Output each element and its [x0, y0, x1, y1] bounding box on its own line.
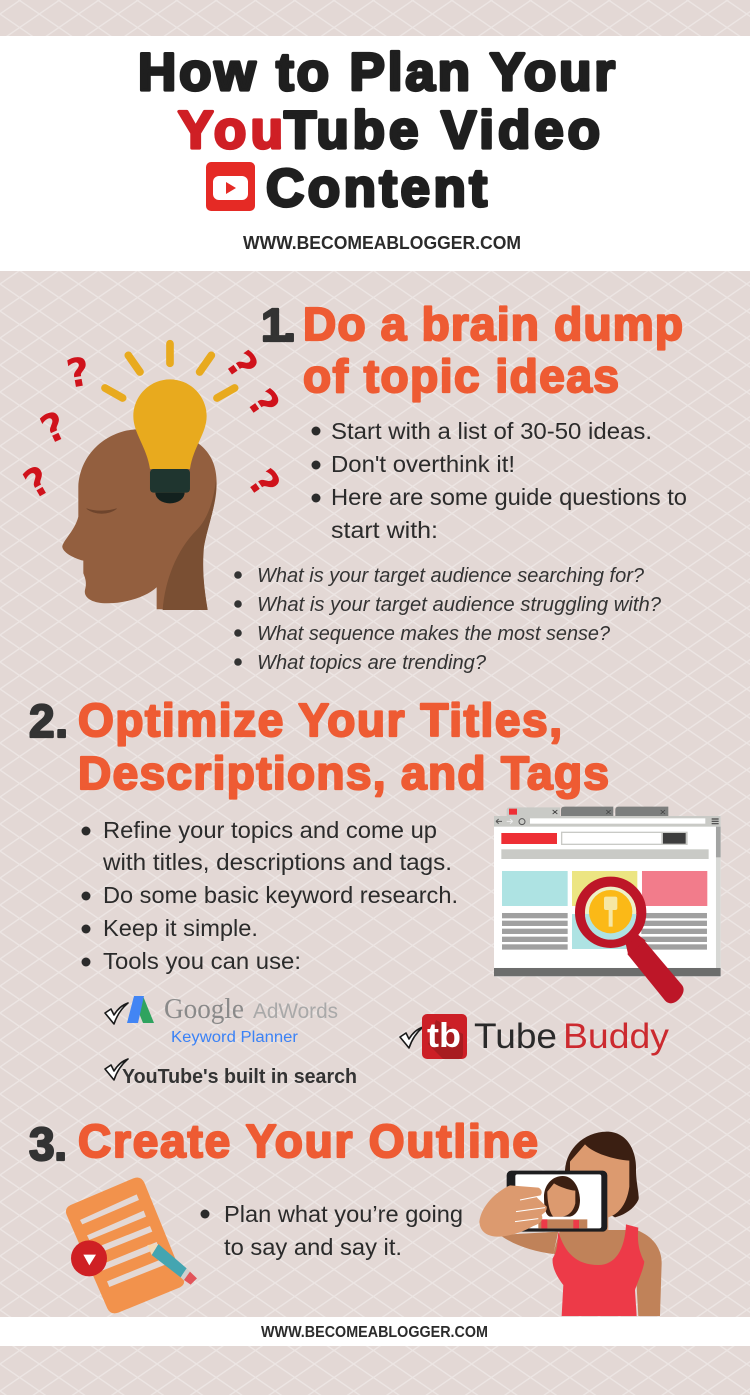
- section 1 bullets: Start with a list of 30-50 ideas.: [331, 418, 652, 444]
- section 2 heading: 2.: [29, 695, 68, 747]
- section 3 heading: Create Your Outline: [78, 1115, 538, 1167]
- section 2 heading: [29, 694, 609, 799]
- icon: browser window with magnifier: [494, 807, 721, 1003]
- tool: tubebuddy: tb: [427, 1017, 461, 1055]
- section 1 heading: Do a brain dump: [303, 298, 683, 350]
- section 2 heading: Descriptions, and Tags: [78, 747, 609, 799]
- guide questions: What is your target audience searching for?: [257, 564, 645, 587]
- section 1 heading: [261, 298, 683, 402]
- section 2 heading: Optimize Your Titles,: [78, 694, 562, 746]
- tool: google adwords keyword planner: Google: [164, 993, 244, 1025]
- footer url: WWW.BECOMEABLOGGER.COM: [261, 1324, 488, 1341]
- tool: google adwords keyword planner: [105, 993, 338, 1046]
- guide questions: What is your target audience struggling with?: [257, 593, 662, 616]
- section 1 heading: 1.: [261, 299, 296, 351]
- section 1 heading: of topic ideas: [303, 350, 619, 402]
- section 3 heading: 3.: [29, 1118, 67, 1170]
- section 3 bullet: Plan what you’re going: [224, 1201, 463, 1227]
- tool: youtube built in search: YouTube's built in search: [122, 1066, 357, 1088]
- website url: WWW.BECOMEABLOGGER.COM: [243, 233, 521, 253]
- section 2 bullets: Refine your topics and come up: [103, 817, 437, 843]
- tool: tubebuddy: Buddy: [563, 1017, 670, 1056]
- icon: head with light bulb and question marks: ?: [238, 382, 288, 426]
- title: How to Plan Your: [138, 43, 615, 102]
- section 3 bullet: [200, 1201, 463, 1260]
- icon: head with light bulb and question marks: ?: [216, 343, 266, 388]
- title: [138, 43, 615, 218]
- section 2 bullets: Tools you can use:: [103, 948, 301, 974]
- icon: head with light bulb and question marks: ?: [63, 350, 94, 398]
- title: You: [178, 101, 283, 160]
- section 1 bullets: Here are some guide questions to: [331, 484, 687, 510]
- tool: tubebuddy: Tube: [474, 1017, 557, 1056]
- tool: youtube built in search: [105, 1059, 357, 1088]
- icon: head with light bulb and question marks: ?: [17, 458, 59, 508]
- section 2 bullets: [82, 817, 458, 974]
- tool: tubebuddy: [400, 1014, 670, 1059]
- icon: woman taking selfie: [479, 1132, 662, 1316]
- tool: google adwords keyword planner: AdWords: [253, 1000, 338, 1023]
- guide questions: What topics are trending?: [257, 651, 487, 674]
- section 3 bullet: to say and say it.: [224, 1234, 402, 1260]
- guide questions: What sequence makes the most sense?: [257, 622, 611, 645]
- icon: document with pencil and play badge: [66, 1177, 197, 1313]
- section 1 bullets: start with:: [331, 517, 438, 543]
- title: Content: [266, 159, 487, 218]
- section 2 bullets: Do some basic keyword research.: [103, 882, 458, 908]
- icon: youtube logo: [206, 162, 255, 211]
- section 2 bullets: Keep it simple.: [103, 915, 258, 941]
- section 1 bullets: [312, 418, 687, 543]
- tool: google adwords keyword planner: Keyword Planner: [171, 1029, 298, 1046]
- icon: head with light bulb and question marks: [17, 343, 288, 610]
- icon: head with light bulb and question marks: ?: [34, 403, 74, 454]
- section 1 bullets: Don't overthink it!: [331, 451, 515, 477]
- icon: head with light bulb and question marks: ?: [238, 462, 288, 506]
- guide questions: [234, 564, 662, 674]
- section 2 bullets: with titles, descriptions and tags.: [102, 849, 452, 875]
- header band: [0, 36, 750, 271]
- title: Tube Video: [284, 101, 600, 160]
- footer band: [0, 1317, 750, 1346]
